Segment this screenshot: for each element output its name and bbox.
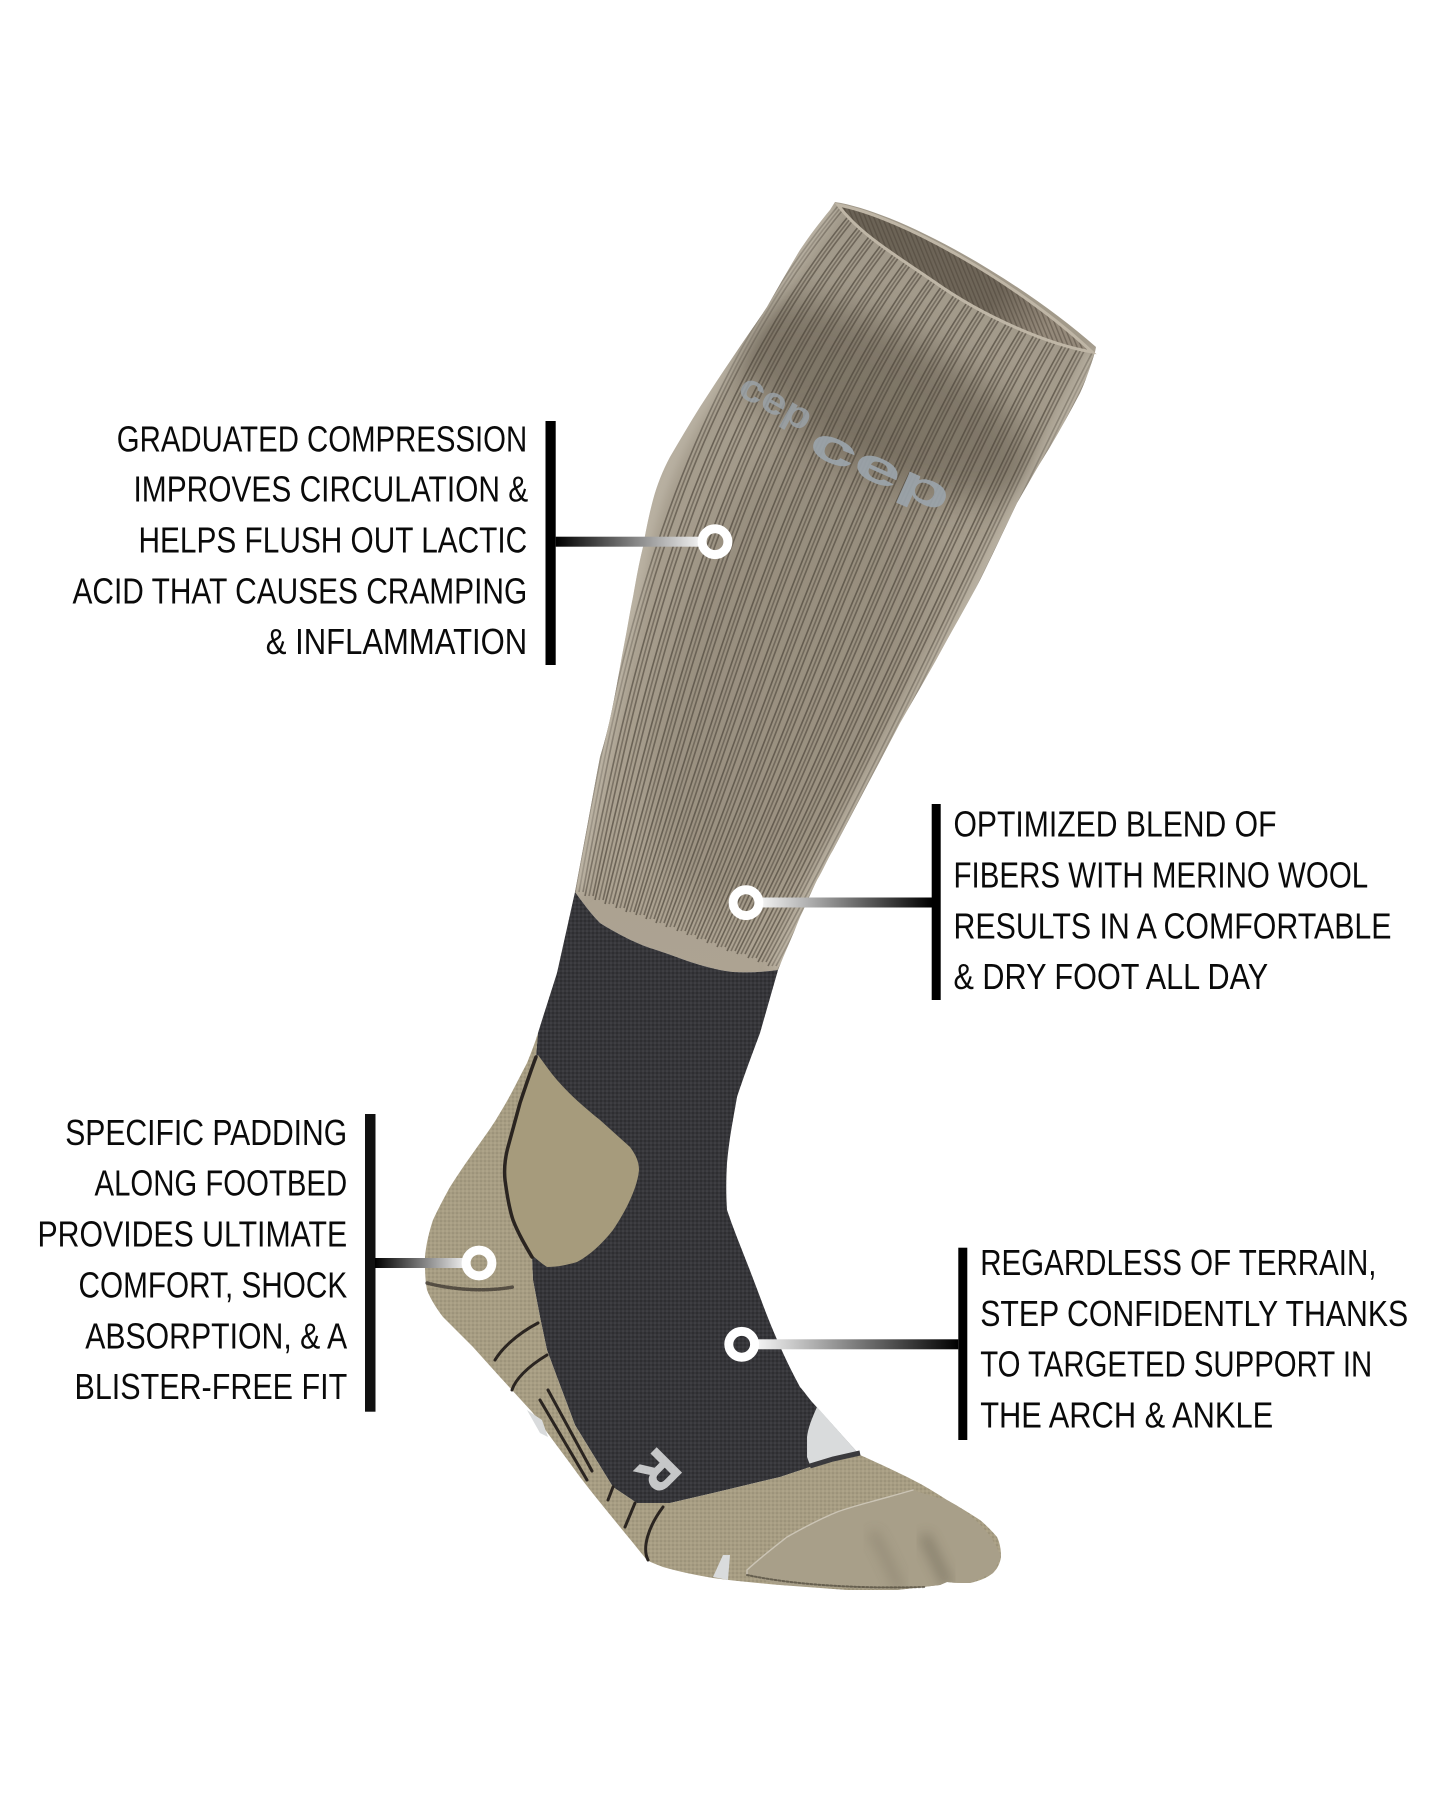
callout: graduated compression [72, 419, 728, 665]
text block [72, 419, 528, 662]
vertical bar [932, 804, 941, 1000]
callout: merino blend [733, 804, 1392, 1000]
foot stripes and seams [427, 1057, 925, 1587]
ankle pad [505, 1055, 639, 1267]
text block: & DRY FOOT ALL DAY [954, 956, 1268, 997]
vertical bar [365, 1114, 376, 1412]
rim opening [838, 205, 1092, 352]
text block: FIBERS WITH MERINO WOOL [954, 854, 1368, 895]
logo on sock [732, 365, 960, 522]
callout: padding [38, 1112, 492, 1412]
text block: PROVIDES ULTIMATE [38, 1214, 347, 1255]
right foot letter mark: R [626, 1438, 691, 1503]
text block: HELPS FLUSH OUT LACTIC [138, 520, 527, 561]
sock leg upper section [560, 190, 1120, 980]
dark accent below white patch [810, 1453, 860, 1466]
panel: sock illustration [425, 190, 1120, 1590]
white accent patches [527, 1407, 857, 1580]
logo on sock: cep [802, 414, 960, 522]
connector [760, 898, 932, 908]
vertical bar [546, 421, 556, 665]
text block: GRADUATED COMPRESSION [117, 419, 527, 460]
text block: OPTIMIZED BLEND OF [954, 804, 1276, 845]
text block: ABSORPTION, & A [85, 1315, 347, 1356]
marker ring [733, 890, 759, 916]
text block: COMFORT, SHOCK [78, 1265, 347, 1306]
text block: BLISTER-FREE FIT [74, 1366, 347, 1407]
text block [954, 804, 1392, 997]
vertical bar [958, 1248, 967, 1440]
text block [980, 1242, 1408, 1435]
connector [757, 1339, 958, 1349]
marker ring [702, 529, 728, 555]
marker ring [729, 1331, 755, 1357]
text block [38, 1112, 347, 1407]
text block: ALONG FOOTBED [94, 1163, 347, 1204]
text block: SPECIFIC PADDING [65, 1112, 347, 1153]
toe cap [747, 1490, 1001, 1590]
heel and foot section [425, 1033, 1001, 1590]
marker ring [466, 1250, 492, 1276]
text block: IMPROVES CIRCULATION & [134, 469, 528, 510]
text block: & INFLAMMATION [266, 621, 527, 662]
text block: THE ARCH & ANKLE [980, 1394, 1273, 1435]
connector [375, 1258, 467, 1268]
callout: terrain support [729, 1242, 1408, 1440]
logo on sock: cep [732, 365, 820, 440]
connector [556, 537, 702, 547]
sock dark ankle section [505, 892, 860, 1503]
text block: ACID THAT CAUSES CRAMPING [72, 570, 527, 611]
